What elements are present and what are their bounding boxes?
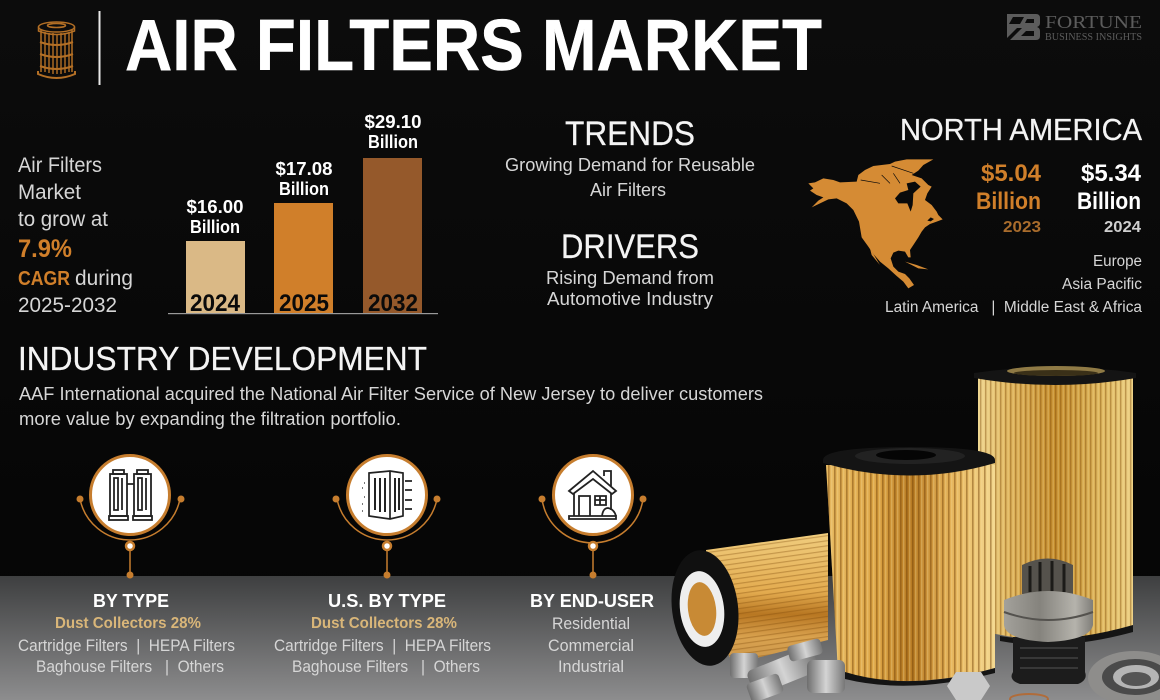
universal joint: [730, 638, 845, 700]
north america heading: NORTH AMERICA: [900, 112, 1142, 147]
bearing: [1088, 651, 1160, 700]
regions list: Europe: [1093, 253, 1142, 270]
text block: CAGR statement: to grow at: [18, 208, 108, 231]
bar 2025: [274, 158, 333, 317]
north america value 2024: Billion: [1077, 188, 1141, 215]
trends block: [505, 115, 755, 200]
bar 2025: 2025: [279, 290, 329, 317]
sub-types: Cartridge Filters | HEPA Filters: [18, 637, 235, 655]
lying filter: [665, 533, 828, 670]
text block: industry development: AAF International acquired the National Air Filter Service of New Jersey to deliver customers: [19, 383, 763, 404]
sub-types: Baghouse Filters | Others: [292, 658, 480, 676]
regions list: Latin America | Middle East & Africa: [885, 299, 1142, 316]
text block: CAGR statement: 7.9%: [18, 235, 72, 263]
north america value 2023: [976, 160, 1042, 236]
drivers block: DRIVERS: [561, 228, 699, 266]
bar 2024: [186, 196, 245, 317]
map: North America: [808, 159, 943, 288]
north america value 2024: [1077, 160, 1142, 236]
drivers block: Automotive Industry: [547, 288, 714, 309]
text block: industry development: more value by expanding the filtration portfolio.: [19, 408, 401, 429]
bar 2032: [363, 111, 422, 317]
end-user list: Commercial: [548, 637, 634, 655]
text block: CAGR statement: CAGR: [18, 268, 70, 290]
text block: CAGR statement: Air Filters: [18, 154, 102, 177]
north america value 2024: 2024: [1104, 219, 1141, 236]
trends block: Growing Demand for Reusable: [505, 154, 755, 175]
text block: CAGR statement: during: [75, 267, 133, 290]
text block: CAGR statement: Market: [18, 181, 81, 204]
regions list: Asia Pacific: [1062, 276, 1142, 293]
sub-types: Cartridge Filters | HEPA Filters: [274, 637, 491, 655]
drivers block: Rising Demand from: [546, 267, 714, 288]
right filter: [974, 366, 1136, 645]
segment: U.S. by type: [274, 456, 491, 676]
sub-types: Baghouse Filters | Others: [36, 658, 224, 676]
bar 2024: 2024: [190, 290, 241, 317]
bar 2032: $29.10: [364, 111, 422, 132]
starter gear: [1004, 558, 1093, 684]
icon: air filter cartridge: [38, 22, 75, 78]
centre filter: [823, 447, 995, 686]
heading: BY END-USER: [530, 590, 654, 611]
text block: industry development: [19, 383, 763, 429]
icon: panel filter in medallion: [332, 456, 440, 578]
north america value 2024: $5.34: [1081, 160, 1142, 187]
north america value 2023: $5.04: [981, 160, 1042, 187]
title: AIR FILTERS MARKET: [125, 6, 822, 86]
bar chart: [168, 111, 438, 317]
heading: U.S. BY TYPE: [328, 590, 446, 611]
heading: BY TYPE: [93, 590, 169, 611]
end-user list: [548, 615, 634, 676]
dominant share: Dust Collectors 28%: [311, 615, 457, 632]
regions list: [885, 253, 1142, 316]
divider line: [98, 11, 100, 85]
logo: Fortune Business Insights: BUSINESS INSIGHTS: [1045, 32, 1142, 43]
segment: by type: [18, 456, 235, 676]
north america value 2023: 2023: [1003, 219, 1041, 236]
bar 2024: $16.00: [186, 196, 244, 217]
nut: [947, 672, 990, 700]
icon: house in medallion: [538, 456, 646, 578]
bar 2032: 2032: [368, 290, 418, 317]
text block: CAGR statement: [18, 154, 133, 317]
logo: Fortune Business Insights: [1007, 12, 1142, 43]
icon: cartridge filters in medallion: [76, 456, 184, 578]
north america value 2023: Billion: [976, 188, 1041, 215]
logo: Fortune Business Insights: FORTUNE: [1045, 12, 1142, 32]
drivers block: [546, 228, 714, 309]
segment: by end-user: [530, 456, 654, 676]
sub-types: [18, 637, 235, 676]
trends block: TRENDS: [565, 115, 695, 153]
photo: air filters and parts: [665, 366, 1160, 700]
bar 2025: Billion: [279, 178, 329, 199]
copper ring: [1010, 694, 1048, 700]
text block: CAGR statement: 2025-2032: [18, 294, 117, 317]
dominant share: Dust Collectors 28%: [55, 615, 201, 632]
sub-types: [274, 637, 491, 676]
heading: industry development: INDUSTRY DEVELOPMENT: [18, 340, 427, 377]
trends block: Air Filters: [590, 179, 666, 200]
bar 2024: Billion: [190, 216, 240, 237]
bar 2032: Billion: [368, 131, 418, 152]
bar 2025: $17.08: [276, 158, 332, 179]
end-user list: Residential: [552, 615, 630, 633]
end-user list: Industrial: [558, 658, 624, 676]
